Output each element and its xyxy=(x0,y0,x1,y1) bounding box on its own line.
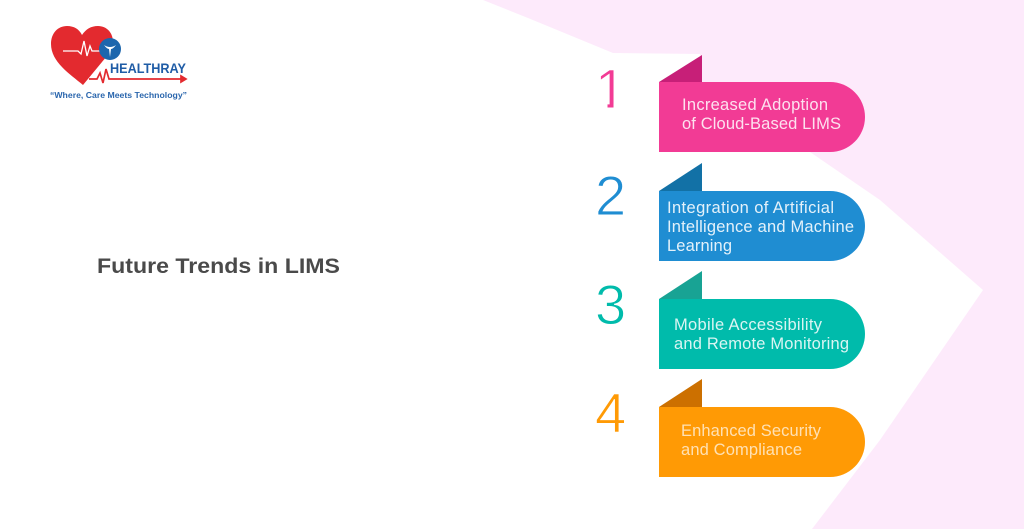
label: Intelligence and Machine xyxy=(667,218,854,236)
label: Enhanced Security xyxy=(681,422,822,440)
step 4: security and compliance xyxy=(595,379,865,477)
flap xyxy=(659,163,702,191)
label xyxy=(667,199,854,255)
label: Mobile Accessibility xyxy=(674,316,823,334)
label: and Compliance xyxy=(681,441,802,459)
label: Integration of Artificial xyxy=(667,199,834,217)
label: and Remote Monitoring xyxy=(674,335,849,353)
number 2: 2 xyxy=(595,164,626,227)
ribbon xyxy=(659,407,865,477)
label xyxy=(681,422,822,459)
step 2: AI and machine learning xyxy=(595,163,865,261)
label: of Cloud-Based LIMS xyxy=(682,115,841,133)
icon: white heartbeat line xyxy=(63,41,103,56)
number 4: 4 xyxy=(595,381,626,444)
icon: blue medical circle xyxy=(99,38,121,60)
step 3: mobile accessibility xyxy=(595,271,865,369)
number 1: 1 xyxy=(595,57,626,120)
number 3: 3 xyxy=(595,273,626,336)
label: Increased Adoption xyxy=(682,96,828,114)
flap xyxy=(659,271,702,299)
label xyxy=(682,96,841,133)
flap xyxy=(659,379,702,407)
ribbon xyxy=(659,299,865,369)
flap xyxy=(659,55,702,82)
ribbon xyxy=(659,82,865,152)
icon: red pulse arrow xyxy=(89,69,186,83)
ribbon xyxy=(659,191,865,261)
brand name: HEALTHRAY xyxy=(110,60,187,76)
step 1: cloud-based LIMS xyxy=(595,55,865,152)
logo: Healthray xyxy=(50,26,187,100)
tagline: “Where, Care Meets Technology” xyxy=(50,90,187,100)
title: Future Trends in LIMS xyxy=(97,254,340,278)
label: Learning xyxy=(667,237,732,255)
pink background shape xyxy=(483,0,1024,529)
label xyxy=(674,316,849,353)
icon: red heart xyxy=(51,26,113,85)
